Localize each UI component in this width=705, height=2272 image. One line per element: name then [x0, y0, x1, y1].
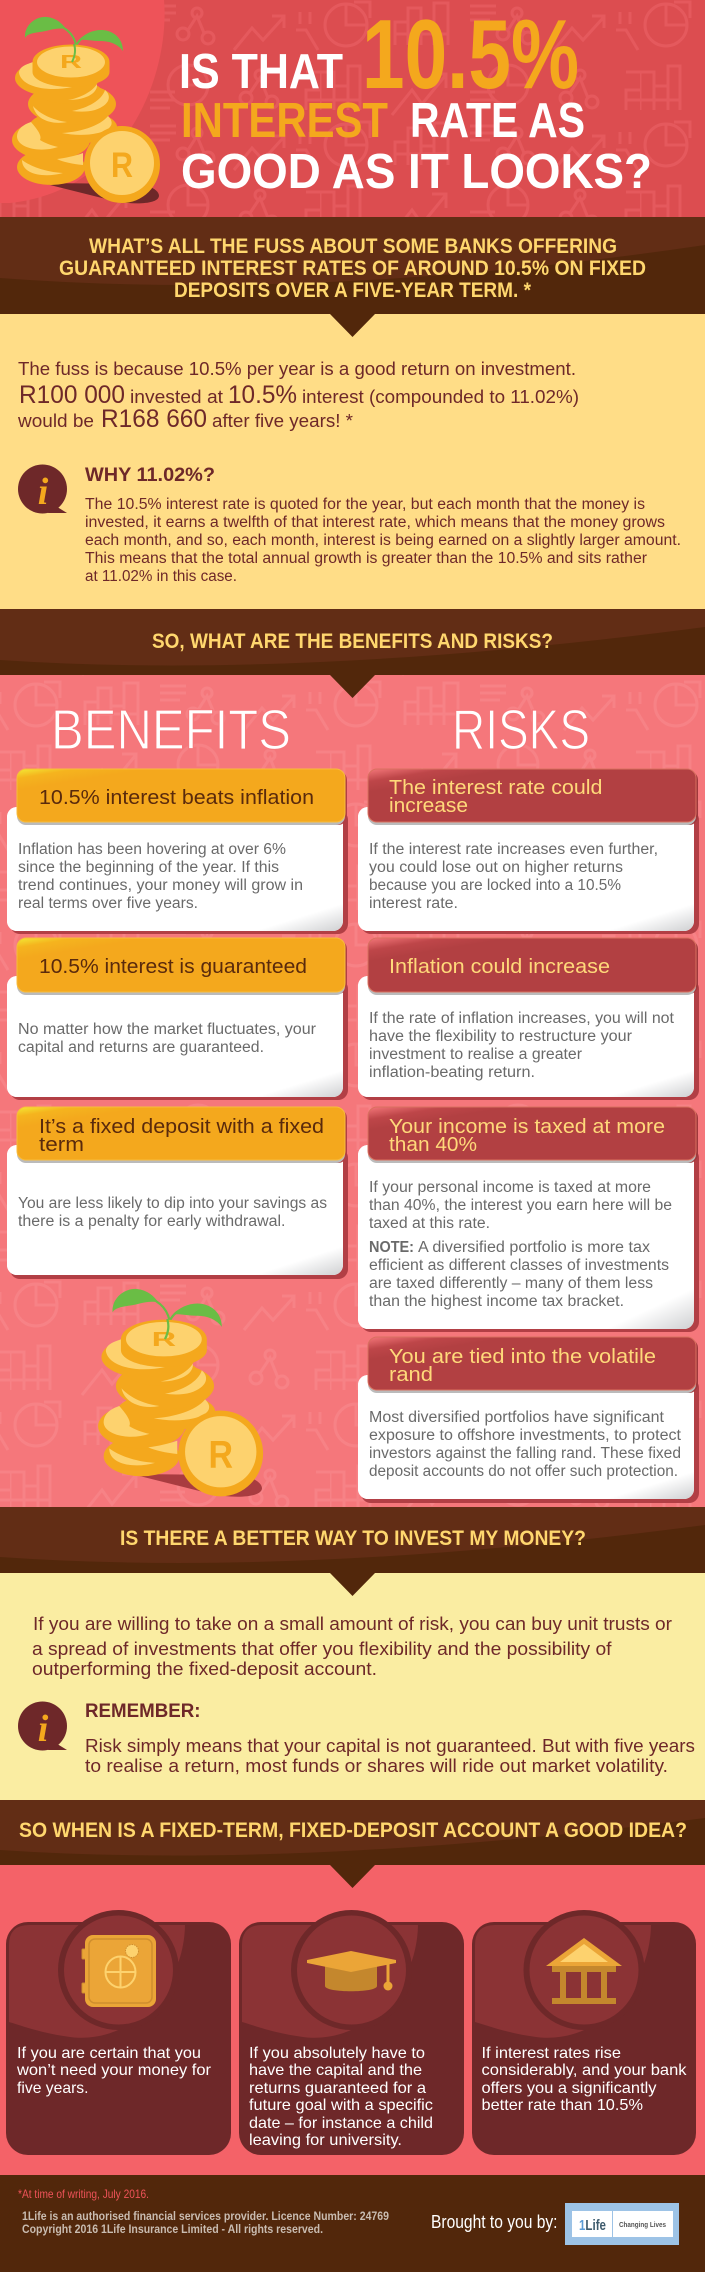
banner: what's all the fuss [0, 217, 705, 337]
card: capital guaranteed for future goal: leaving for university. [249, 2132, 402, 2149]
card: interest rate could increase: The interest rate could [389, 777, 602, 799]
banner: benefits and risks [0, 609, 705, 698]
card: inflation could increase: Inflation could increase [389, 956, 610, 978]
card: interest rate could increase: If the interest rate increases even further, [369, 841, 658, 858]
card: income taxed [358, 1107, 699, 1332]
card: inflation could increase: inflation-beating return. [369, 1064, 535, 1081]
text: the fuss explanation: R100 000 [19, 381, 125, 409]
card: income taxed: than 40%, the interest you earn here will be [369, 1197, 672, 1214]
card: capital guaranteed for future goal: returns guaranteed for a [249, 2080, 426, 2097]
card: won't need money: If you are certain that you [17, 2045, 201, 2062]
card: fixed deposit: there is a penalty for early withdrawal. [18, 1213, 286, 1230]
footer [0, 2175, 705, 2272]
card: beats inflation: real terms over five years. [18, 895, 198, 912]
card: tied into the rand: exposure to offshore investments, to protect [369, 1427, 682, 1444]
text: better way paragraph: outperforming the fixed-deposit account. [32, 1659, 377, 1679]
card: beats inflation: 10.5% interest beats inflation [39, 787, 314, 809]
card: interest rate could increase: increase [389, 795, 468, 817]
card: beats inflation: Inflation has been hovering at over 6% [18, 841, 286, 858]
footnote: *At time of writing, July 2016. [18, 2187, 149, 2201]
icon: info bubble: i [38, 471, 49, 513]
card: interest rate could increase: because you are locked into a 10.5% [369, 877, 621, 894]
callout: why 11.02%: each month, and so, each month, interest is being earned on a slightly larger amount. [85, 532, 681, 549]
card: capital guaranteed for future goal: If you absolutely have to [249, 2045, 425, 2062]
card: capital guaranteed for future goal: date – for instance a child [249, 2115, 433, 2132]
icon: info bubble [18, 464, 67, 514]
title: RATE AS [410, 94, 585, 148]
card: capital guaranteed for future goal: future goal with a specific [249, 2097, 433, 2114]
banner: better way: IS THERE A BETTER WAY TO INVEST MY MONEY? [120, 1527, 586, 1550]
card: tied into the rand: deposit accounts do not offer such protection. [369, 1463, 678, 1480]
logo: 1Life [565, 2203, 679, 2245]
card: inflation could increase [358, 938, 699, 1100]
card: fixed deposit: You are less likely to dip into your savings as [18, 1195, 327, 1212]
text: the fuss explanation: invested at [130, 386, 223, 407]
panel: better way section [0, 1573, 705, 1800]
card: interest rates rise: considerably, and your bank [482, 2062, 688, 2079]
card: income taxed: NOTE: [369, 1239, 414, 1256]
icon: info bubble [18, 1702, 67, 1750]
logo: 1Life: 1Life [579, 2217, 606, 2234]
banner: better way [0, 1507, 705, 1596]
card: interest guaranteed [7, 938, 348, 1100]
card: income taxed: efficient as different classes of investments [369, 1257, 669, 1274]
callout: why 11.02%: invested, it earns a twelfth of that interest rate, which means that the money grows [85, 514, 665, 531]
header panel [0, 0, 705, 217]
card: interest rate could increase: you could lose out on higher returns [369, 859, 623, 876]
card: income taxed: than 40% [389, 1134, 477, 1156]
callout: remember: to realise a return, most funds or shares will ride out market volatility. [85, 1756, 668, 1776]
callout: remember: REMEMBER: [85, 1701, 200, 1722]
callout: remember: Risk simply means that your capital is not guaranteed. But with five years [85, 1736, 695, 1756]
card: won't need money [6, 1910, 231, 2155]
icon: info bubble: i [38, 1708, 49, 1750]
title: INTEREST [181, 94, 388, 148]
card: income taxed: than the highest income tax bracket. [369, 1293, 624, 1310]
card: beats inflation: since the beginning of the year. If this [18, 859, 279, 876]
legal text: 1Life is an authorised financial services provider. Licence Number: 24769 [22, 2209, 389, 2223]
card: won't need money: five years. [17, 2080, 88, 2097]
illustration: coin stack with seedling: R [111, 146, 133, 185]
text: better way paragraph: a spread of investments that offer you flexibility and the possibility of [32, 1639, 613, 1659]
callout: why 11.02%: WHY 11.02%? [85, 465, 215, 486]
card: inflation could increase: have the flexibility to restructure your [369, 1028, 632, 1045]
brought to you by: Brought to you by: [431, 2212, 558, 2232]
banner: benefits and risks: SO, WHAT ARE THE BENEFITS AND RISKS? [152, 630, 553, 653]
banner: what's all the fuss: GUARANTEED INTEREST RATES OF AROUND 10.5% ON FIXED [59, 257, 646, 280]
illustration: coin stack in benefits column: R [208, 1433, 233, 1476]
card: income taxed: taxed at this rate. [369, 1215, 490, 1232]
callout: why 11.02%: The 10.5% interest rate is quoted for the year, but each month that the money is [85, 496, 645, 513]
illustration: coin stack with seedling: R [60, 52, 82, 72]
card: interest guaranteed: 10.5% interest is guaranteed [39, 956, 307, 978]
card: beats inflation: trend continues, your money will grow in [18, 877, 303, 894]
text: the fuss explanation: interest (compounded to 11.02%) [302, 386, 579, 407]
banner: what's all the fuss: WHAT’S ALL THE FUSS ABOUT SOME BANKS OFFERING [89, 235, 617, 258]
card: fixed deposit [7, 1107, 348, 1279]
title: IS THAT [179, 45, 343, 99]
card: interest rates rise [472, 1910, 696, 2155]
icon: graduation cap [307, 1951, 396, 1991]
card: inflation could increase: investment to realise a greater [369, 1046, 582, 1063]
card: income taxed: Your income is taxed at more [389, 1116, 665, 1138]
card: tied into the rand: rand [389, 1364, 433, 1386]
card: interest rate could increase: interest rate. [369, 895, 458, 912]
card: tied into the rand: investors against the falling rand. These fixed [369, 1445, 681, 1462]
card: interest rates rise: better rate than 10.5% [482, 2097, 643, 2114]
callout: why 11.02%: This means that the total annual growth is greater than the 10.5% and sits rather [85, 550, 647, 567]
title: 10.5% [362, 0, 579, 109]
text: the fuss explanation: The fuss is because 10.5% per year is a good return on investment. [18, 358, 576, 379]
card: tied into the rand: You are tied into the volatile [389, 1346, 656, 1368]
panel: intro cream section [0, 314, 705, 609]
icon: bank [546, 1938, 622, 2004]
card: interest guaranteed: No matter how the market fluctuates, your [18, 1021, 316, 1038]
logo: 1Life: Changing Lives [619, 2222, 666, 2229]
callout: why 11.02%: at 11.02% in this case. [85, 568, 237, 585]
card: interest rate could increase [358, 769, 699, 934]
card: won't need money: won’t need your money for [16, 2062, 212, 2079]
title [179, 0, 652, 199]
banner: good idea [0, 1800, 705, 1888]
illustration: coin stack with seedling [12, 17, 160, 203]
heading: risks: RISKS [452, 698, 590, 762]
banner: what's all the fuss: DEPOSITS OVER A FIVE-YEAR TERM. * [174, 279, 532, 302]
card: interest rates rise: offers you a significantly [482, 2080, 656, 2097]
legal text [22, 2209, 389, 2236]
card: fixed deposit: It’s a fixed deposit with a fixed [39, 1116, 324, 1138]
illustration: coin stack in benefits column [98, 1289, 263, 1497]
card: income taxed: are taxed differently – many of them less [369, 1275, 653, 1292]
illustration: coin stack in benefits column: R [152, 1329, 177, 1351]
panel: good idea section [0, 1865, 705, 2175]
text: the fuss explanation: R168 660 [101, 405, 207, 433]
card: capital guaranteed for future goal: have the capital and the [249, 2062, 422, 2079]
card: capital guaranteed for future goal [239, 1910, 464, 2155]
callout: why 11.02% [85, 465, 681, 585]
text: the fuss explanation [17, 358, 579, 433]
icon: safe [82, 1935, 156, 2007]
card: income taxed: If your personal income is taxed at more [369, 1179, 651, 1196]
title: GOOD AS IT LOOKS? [181, 145, 652, 199]
card: interest rates rise: If interest rates rise [482, 2045, 621, 2062]
card: beats inflation [7, 769, 348, 934]
legal text: Copyright 2016 1Life Insurance Limited - All rights reserved. [22, 2222, 323, 2236]
text: the fuss explanation: would be [17, 410, 94, 431]
callout: remember [85, 1701, 695, 1776]
card: inflation could increase: If the rate of inflation increases, you will not [369, 1010, 675, 1027]
card: fixed deposit: term [39, 1134, 84, 1156]
panel: benefits and risks background [0, 675, 705, 1507]
card: income taxed: A diversified portfolio is more tax [418, 1239, 650, 1256]
text: better way paragraph: If you are willing to take on a small amount of risk, you can buy unit trusts or [33, 1614, 672, 1634]
card: tied into the rand: Most diversified portfolios have significant [369, 1409, 665, 1426]
heading: benefits: BENEFITS [51, 698, 291, 762]
card: interest guaranteed: capital and returns are guaranteed. [18, 1039, 264, 1056]
text: the fuss explanation: 10.5% [228, 381, 297, 409]
card: tied into the rand [358, 1337, 699, 1503]
text: the fuss explanation: after five years! * [212, 410, 353, 431]
text: better way paragraph [32, 1614, 672, 1679]
